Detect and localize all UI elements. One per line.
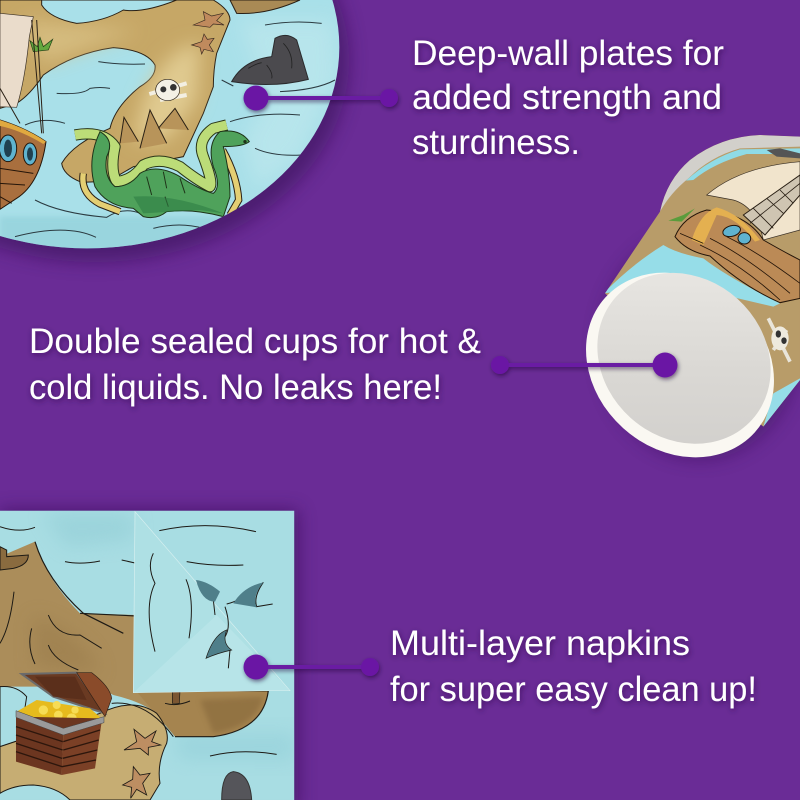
treasure chest — [16, 673, 112, 775]
mountains — [120, 108, 188, 148]
cup description text: Double sealed cups for hot & — [29, 322, 481, 361]
starfish — [192, 34, 214, 54]
grass — [668, 208, 695, 222]
starfish — [123, 767, 150, 798]
plate description text: sturdiness. — [412, 123, 580, 162]
plate description text: added strength and — [412, 78, 722, 117]
cup description text — [29, 322, 481, 407]
skull — [768, 318, 790, 362]
sail — [0, 13, 33, 107]
waves — [0, 527, 277, 756]
land contour lines — [0, 592, 102, 670]
ship hull — [675, 210, 800, 303]
lower land — [0, 705, 167, 800]
rigging net — [743, 175, 800, 235]
pond on left — [0, 686, 27, 747]
napkin description text: for super easy clean up! — [390, 670, 757, 709]
napkin description text: Multi-layer napkins — [390, 624, 690, 663]
grass — [30, 37, 53, 52]
cup base — [548, 234, 800, 496]
top right land — [230, 0, 300, 13]
ship hull — [0, 120, 46, 209]
rock — [767, 148, 800, 158]
cup description text: cold liquids. No leaks here! — [29, 368, 442, 407]
skull and crossbones — [149, 79, 187, 101]
top pond — [42, 0, 177, 23]
plate description text: Deep-wall plates for — [412, 34, 724, 73]
folded corner — [133, 512, 290, 693]
plate with pirate map — [0, 0, 349, 262]
starfish — [124, 729, 161, 755]
cave hole top — [0, 547, 28, 570]
connector: cup callout — [491, 352, 678, 378]
plate description text — [412, 34, 724, 162]
napkin with pirate map — [0, 510, 298, 800]
fin top right — [187, 562, 273, 607]
tree stump — [172, 691, 180, 703]
land: main island — [0, 0, 230, 182]
napkin land — [0, 542, 175, 736]
connector: plate callout — [244, 86, 398, 110]
rock — [232, 35, 308, 85]
sea serpent — [75, 125, 249, 218]
paper cup — [586, 135, 800, 465]
napkin description text — [390, 624, 757, 709]
connector: napkin callout — [244, 654, 379, 680]
rock — [222, 772, 252, 800]
ship sail — [707, 162, 800, 240]
starfish — [193, 12, 224, 27]
